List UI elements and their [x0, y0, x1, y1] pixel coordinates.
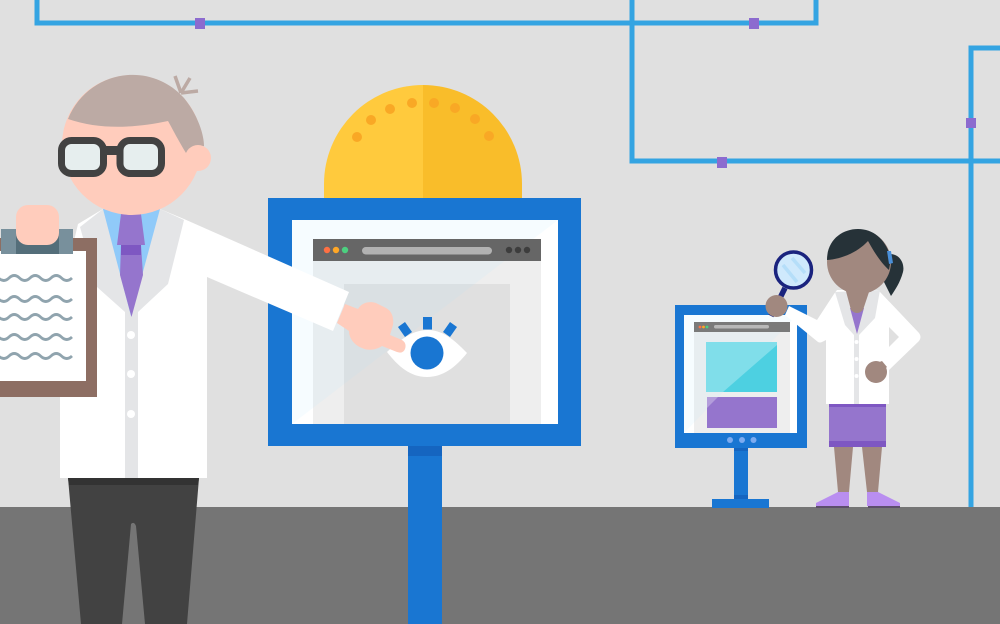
lab coat	[785, 290, 920, 404]
head	[827, 230, 891, 294]
blouse	[850, 308, 864, 334]
magnifying glass	[771, 252, 812, 316]
purple content block	[707, 397, 777, 428]
trousers	[68, 478, 199, 624]
hand on hip	[865, 361, 887, 383]
lapels	[80, 209, 184, 478]
large monitor pole	[408, 446, 442, 624]
floor	[0, 507, 1000, 624]
coat buttons	[127, 331, 135, 418]
hair	[827, 229, 891, 270]
legs	[834, 447, 882, 492]
man in lab coat	[0, 75, 406, 624]
browser toolbar	[313, 239, 541, 261]
glasses	[62, 140, 162, 174]
shirt	[103, 209, 160, 316]
coat buttons	[854, 340, 858, 378]
screen glare	[292, 220, 558, 424]
clipboard	[0, 229, 97, 397]
ear	[185, 145, 211, 171]
lab coat	[60, 209, 349, 478]
hair	[68, 75, 204, 153]
cyan content block	[706, 342, 777, 392]
lapels	[835, 290, 880, 404]
head	[62, 75, 202, 215]
woman in lab coat	[766, 229, 920, 508]
circuit lines with connectors	[37, 0, 1000, 507]
shoes	[816, 492, 900, 508]
hair clip	[887, 251, 893, 264]
tie	[117, 214, 145, 317]
icon: eye	[387, 317, 467, 377]
large monitor	[268, 198, 581, 446]
small monitor	[675, 305, 807, 508]
pointing hand	[337, 302, 406, 353]
hand holding clipboard	[16, 205, 59, 245]
neck	[843, 280, 873, 313]
scribbled text lines	[0, 276, 72, 358]
yellow brain dome	[324, 85, 522, 198]
skirt	[829, 404, 886, 447]
hand holding magnifier	[766, 295, 788, 317]
ponytail	[883, 254, 903, 296]
